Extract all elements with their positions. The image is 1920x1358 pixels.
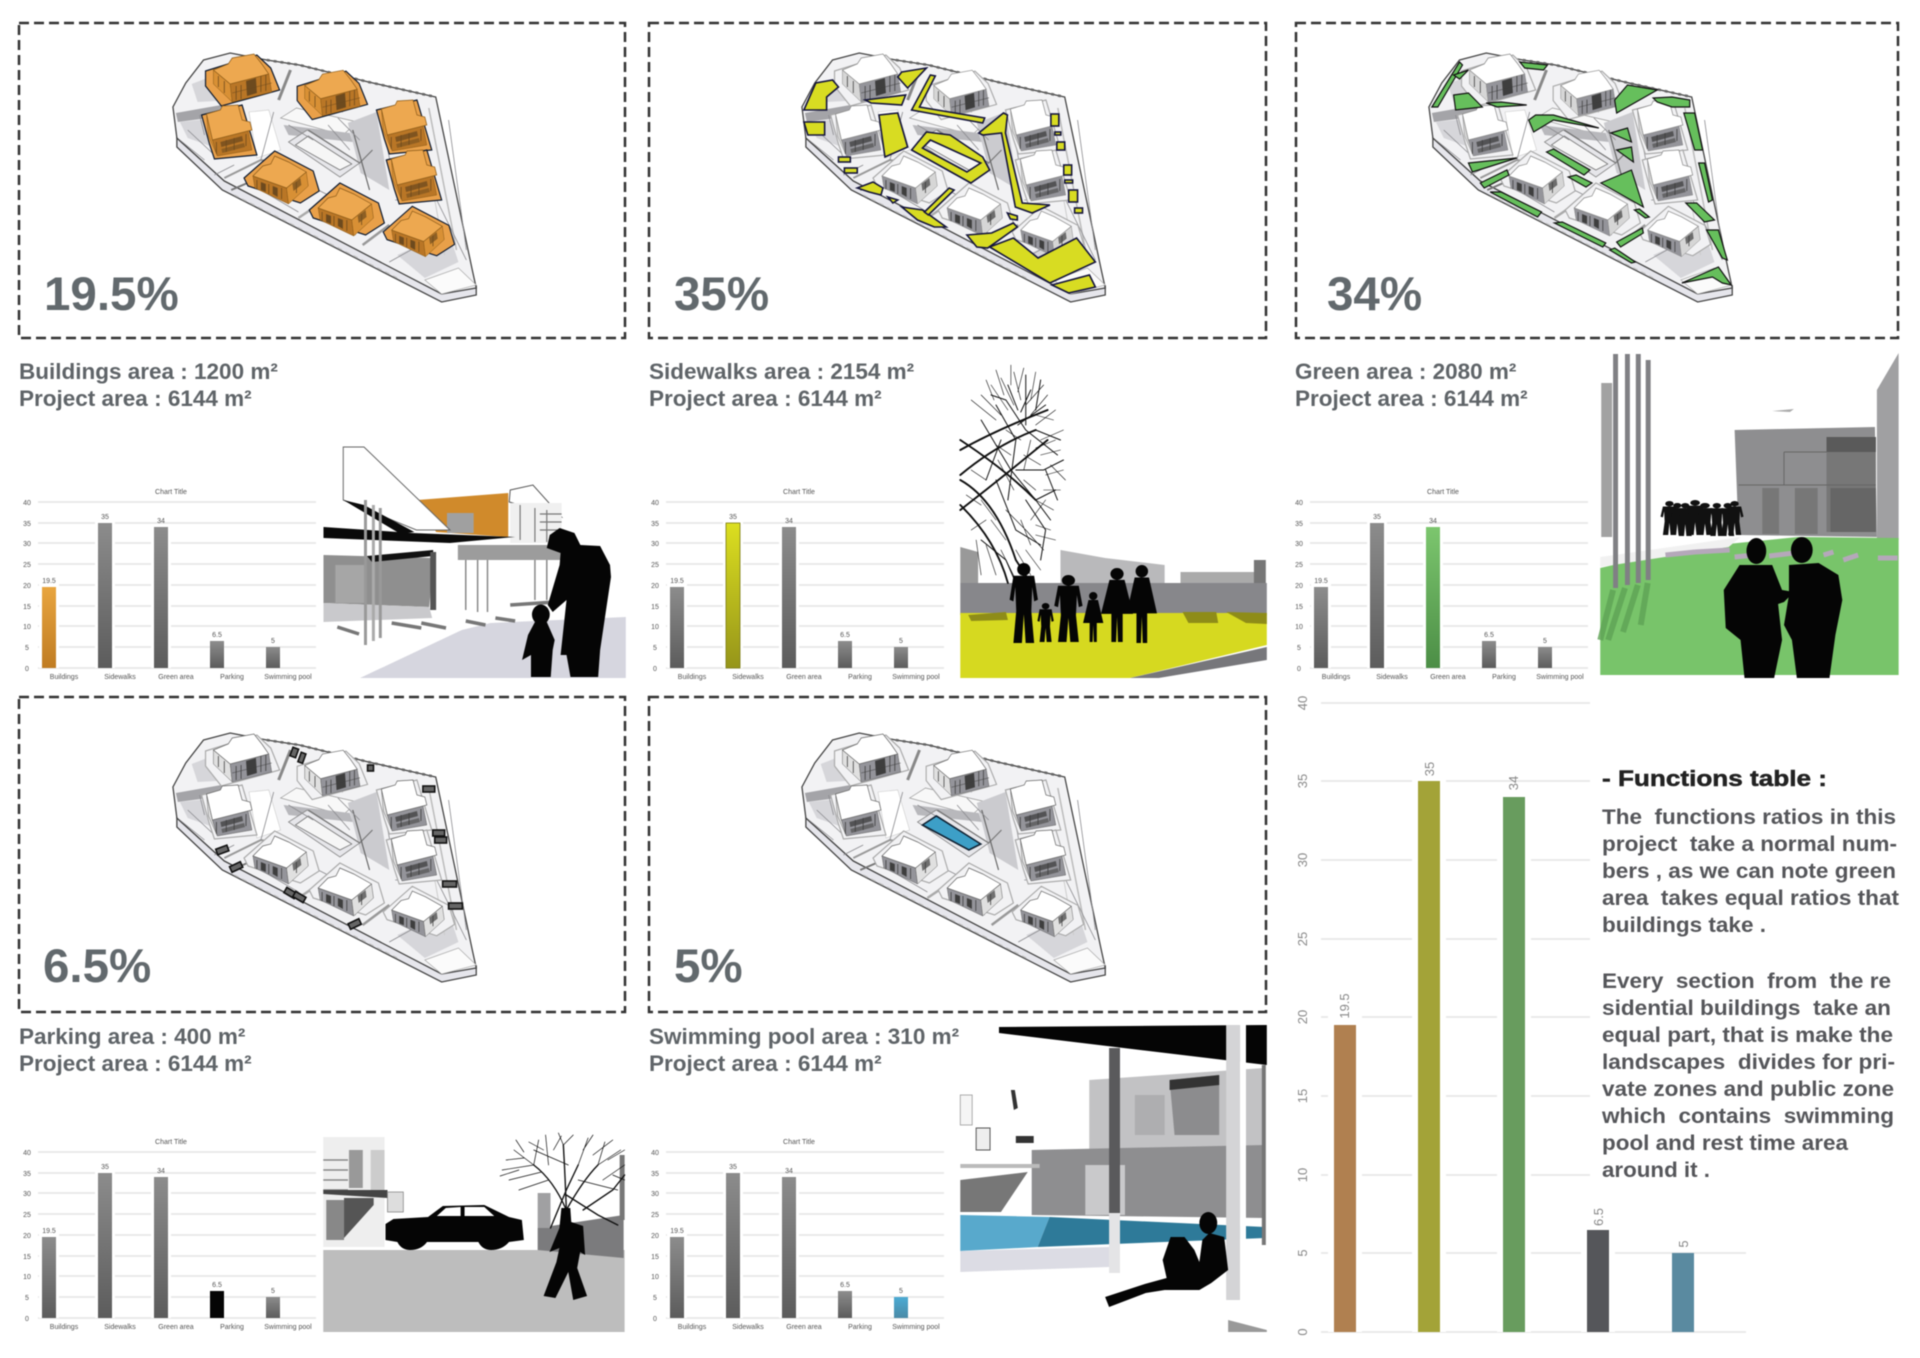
bar chart: parking highlighted: 34 (157, 1168, 165, 1175)
bar chart: green area highlighted (1295, 489, 1588, 681)
text: swimming pool area: Project area : 6144 m² (649, 1051, 882, 1076)
overall functions bar chart: 20 (1295, 1010, 1310, 1024)
text block: functions description: vate zones and public zone (1602, 1078, 1894, 1101)
text: parking area: Project area : 6144 m² (19, 1051, 252, 1076)
bar chart: green area highlighted: 0 (1297, 666, 1301, 673)
bar chart: green area highlighted: 40 (1295, 500, 1303, 507)
panel: sidewalks site diagram (649, 23, 1266, 338)
bar chart: buildings highlighted: 5 (271, 638, 275, 645)
bar chart: buildings highlighted: Parking (220, 674, 244, 681)
bar chart: swimming pool highlighted: 35 (729, 1164, 737, 1171)
heading: functions table: - Functions table : (1602, 766, 1827, 791)
text: sidewalks area: Project area : 6144 m² (649, 386, 882, 411)
overall functions bar chart: 15 (1295, 1089, 1310, 1103)
text block: functions description: around it . (1602, 1159, 1710, 1182)
panel: buildings site diagram (19, 23, 625, 338)
bar chart: buildings highlighted: 0 (25, 666, 29, 673)
overall functions bar chart: 0 (1295, 1328, 1310, 1336)
bar chart: sidewalks highlighted: 19.5 (670, 578, 684, 585)
bar chart: sidewalks highlighted: 40 (651, 500, 659, 507)
bar chart: parking highlighted: 10 (23, 1274, 31, 1281)
bar chart: buildings highlighted: 35 (23, 521, 31, 528)
percentage: swimming pool: 5% (674, 940, 743, 993)
bar chart: buildings highlighted: 40 (23, 500, 31, 507)
bar chart: buildings highlighted: 20 (23, 583, 31, 590)
bar chart: buildings highlighted: Green area (158, 674, 194, 681)
bar chart: parking highlighted: 20 (23, 1233, 31, 1240)
bar chart: green area highlighted: Chart Title (1427, 489, 1459, 496)
bar chart: swimming pool highlighted: 30 (651, 1191, 659, 1198)
bar chart: sidewalks highlighted: 20 (651, 583, 659, 590)
overall functions bar chart: 35 (1295, 774, 1310, 788)
bar chart: parking highlighted: 35 (101, 1164, 109, 1171)
bar chart: parking highlighted: Buildings (50, 1324, 79, 1331)
bar chart: green area highlighted: 30 (1295, 541, 1303, 548)
text block: functions description: which contains swimming (1601, 1105, 1894, 1128)
bar chart: green area highlighted: 10 (1295, 624, 1303, 631)
bar chart: parking highlighted: Green area (158, 1324, 194, 1331)
bar chart: sidewalks highlighted: 34 (785, 518, 793, 525)
bar chart: swimming pool highlighted (651, 1139, 944, 1331)
bar chart: sidewalks highlighted: 25 (651, 562, 659, 569)
bar chart: parking highlighted: 0 (25, 1316, 29, 1323)
bar chart: parking highlighted: 6.5 (212, 1282, 222, 1289)
bar chart: swimming pool highlighted: 19.5 (670, 1228, 684, 1235)
silhouettes: family (1010, 563, 1157, 643)
bar chart: green area highlighted: 19.5 (1314, 578, 1328, 585)
text: green area (1295, 359, 1528, 411)
bar chart: parking highlighted: 30 (23, 1191, 31, 1198)
overall functions bar chart: 10 (1295, 1168, 1310, 1182)
bar chart: sidewalks highlighted: 0 (653, 666, 657, 673)
bar chart: buildings highlighted: Buildings (50, 674, 79, 681)
bar chart: green area highlighted: 34 (1429, 518, 1437, 525)
bar chart: green area highlighted: 15 (1295, 604, 1303, 611)
bar chart: green area highlighted: 25 (1295, 562, 1303, 569)
bar chart: parking highlighted: 25 (23, 1212, 31, 1219)
bar chart: sidewalks highlighted: 35 (651, 521, 659, 528)
bar chart: sidewalks highlighted (651, 489, 944, 681)
silhouette: walking man (544, 1208, 587, 1300)
bar chart: buildings highlighted: Sidewalks (104, 674, 136, 681)
bar chart: sidewalks highlighted: Swimming pool (892, 674, 940, 681)
bar chart: buildings highlighted: 35 (101, 514, 109, 521)
text block: functions description: bers , as we can note green (1602, 860, 1896, 883)
tree (500, 1133, 625, 1228)
text: parking area: Parking area : 400 m² (19, 1024, 246, 1049)
percentage: parking: 6.5% (43, 940, 151, 993)
overall functions bar chart: 6.5 (1591, 1208, 1606, 1226)
scene: car and walking man (323, 1133, 625, 1332)
bar chart: green area highlighted: Buildings (1322, 674, 1351, 681)
overall functions bar chart: 25 (1295, 932, 1310, 946)
bar chart: swimming pool highlighted: 6.5 (840, 1282, 850, 1289)
percentage: green area: 34% (1327, 268, 1422, 321)
bar chart: parking highlighted: Sidewalks (104, 1324, 136, 1331)
bar chart: green area highlighted: 35 (1373, 514, 1381, 521)
overall functions bar chart: 34 (1506, 776, 1521, 790)
silhouette: seated person (1105, 1212, 1228, 1307)
bar chart: green area highlighted: Swimming pool (1536, 674, 1584, 681)
bar chart: swimming pool highlighted: 10 (651, 1274, 659, 1281)
overall functions bar chart: 19.5 (1337, 993, 1352, 1019)
swimming pool highlight (922, 816, 981, 850)
bar chart: parking highlighted: Chart Title (155, 1139, 187, 1146)
text: buildings area (19, 359, 278, 411)
text: sidewalks area: Sidewalks area : 2154 m² (649, 359, 915, 384)
bar chart: buildings highlighted: Chart Title (155, 489, 187, 496)
bar chart: swimming pool highlighted: Sidewalks (732, 1324, 764, 1331)
bar chart: sidewalks highlighted: 30 (651, 541, 659, 548)
panel: swimming pool site diagram (649, 697, 1266, 1012)
overall functions bar chart: 30 (1295, 853, 1310, 867)
text block: functions description: landscapes divides for pri- (1602, 1051, 1895, 1074)
bar chart: sidewalks highlighted: 5 (899, 638, 903, 645)
bar chart: swimming pool highlighted: Chart Title (783, 1139, 815, 1146)
scene: father and child at entrance (323, 447, 626, 678)
silhouette: car (386, 1205, 524, 1250)
bar chart: green area highlighted: 5 (1543, 638, 1547, 645)
bar chart: green area highlighted: Green area (1430, 674, 1466, 681)
bar chart: swimming pool highlighted: 34 (785, 1168, 793, 1175)
bar chart: green area highlighted: 20 (1295, 583, 1303, 590)
text block: functions description: Every section from the re (1602, 970, 1891, 993)
bar chart: parking highlighted: 15 (23, 1254, 31, 1261)
bar chart: buildings highlighted: 34 (157, 518, 165, 525)
bar chart: swimming pool highlighted: Buildings (678, 1324, 707, 1331)
percentage: buildings: 19.5% (44, 268, 179, 321)
bar chart: parking highlighted: Parking (220, 1324, 244, 1331)
panel: parking site diagram (19, 697, 625, 1012)
text: swimming pool area (649, 1024, 960, 1076)
silhouette: child (522, 605, 555, 677)
text block: functions description: area takes equal ratios that (1602, 887, 1899, 910)
bar chart: sidewalks highlighted: Sidewalks (732, 674, 764, 681)
bar chart: swimming pool highlighted: 40 (651, 1150, 659, 1157)
scene: two men on green lawn (1600, 353, 1899, 678)
bar chart: sidewalks highlighted: 15 (651, 604, 659, 611)
bar chart: swimming pool highlighted: Swimming pool (892, 1324, 940, 1331)
bar chart: sidewalks highlighted: 6.5 (840, 632, 850, 639)
bar chart: green area highlighted: 5 (1297, 645, 1301, 652)
bar chart: swimming pool highlighted: Parking (848, 1324, 872, 1331)
silhouettes: distant crowd (1661, 500, 1744, 536)
bar chart: parking highlighted: 5 (271, 1288, 275, 1295)
text block: functions description: project take a normal num- (1602, 833, 1897, 856)
bar chart: parking highlighted: 5 (25, 1295, 29, 1302)
silhouette: father (547, 528, 611, 677)
bar chart: buildings highlighted: 30 (23, 541, 31, 548)
bar chart: swimming pool highlighted: 15 (651, 1254, 659, 1261)
bar chart: swimming pool highlighted: Green area (786, 1324, 822, 1331)
silhouette: right man (1784, 537, 1842, 678)
text block: functions description (1601, 806, 1899, 1182)
text: buildings area: Project area : 6144 m² (19, 386, 252, 411)
bar chart: swimming pool highlighted: 25 (651, 1212, 659, 1219)
bar chart: green area highlighted: Sidewalks (1376, 674, 1408, 681)
scene: family on yellow sidewalk (960, 365, 1267, 678)
bar chart: swimming pool highlighted: 5 (899, 1288, 903, 1295)
tree (960, 365, 1065, 583)
percentage: sidewalks: 35% (674, 268, 769, 321)
bar chart: green area highlighted: 6.5 (1484, 632, 1494, 639)
bar chart: buildings highlighted: 10 (23, 624, 31, 631)
text block: functions description: pool and rest time area (1602, 1132, 1848, 1155)
overall functions bar chart: 5 (1295, 1249, 1310, 1257)
text: green area: Project area : 6144 m² (1295, 386, 1528, 411)
text: buildings area: Buildings area : 1200 m² (19, 359, 278, 384)
bar chart: swimming pool highlighted: 5 (653, 1295, 657, 1302)
bar chart: green area highlighted: 35 (1295, 521, 1303, 528)
text block: functions description: sidential buildings take an (1602, 997, 1891, 1020)
bar chart: parking highlighted: 19.5 (42, 1228, 56, 1235)
overall functions bar chart: 40 (1295, 696, 1310, 710)
text block: functions description: The functions ratios in this (1602, 806, 1896, 829)
sidewalks highlight (804, 68, 1095, 293)
overall functions bar chart: 5 (1676, 1240, 1691, 1248)
bar chart: parking highlighted: 35 (23, 1171, 31, 1178)
text: swimming pool area: Swimming pool area : 310 m² (649, 1024, 960, 1049)
text block: functions description: equal part, that is make the (1602, 1024, 1893, 1047)
bar chart: parking highlighted (23, 1139, 316, 1331)
bar chart: swimming pool highlighted: 0 (653, 1316, 657, 1323)
bar chart: parking highlighted: Swimming pool (264, 1324, 312, 1331)
bar chart: buildings highlighted: 25 (23, 562, 31, 569)
green area highlight (1432, 62, 1731, 285)
bar chart: buildings highlighted: Swimming pool (264, 674, 312, 681)
text block: functions description: buildings take . (1602, 914, 1766, 937)
bar chart: sidewalks highlighted: Parking (848, 674, 872, 681)
bar chart: buildings highlighted: 6.5 (212, 632, 222, 639)
bar chart: buildings highlighted: 5 (25, 645, 29, 652)
text: green area: Green area : 2080 m² (1295, 359, 1517, 384)
bar chart: sidewalks highlighted: 10 (651, 624, 659, 631)
bar chart: green area highlighted: Parking (1492, 674, 1516, 681)
overall functions bar chart (1295, 696, 1746, 1336)
panel: green area site diagram (1296, 23, 1898, 338)
bar chart: sidewalks highlighted: Chart Title (783, 489, 815, 496)
overall functions bar chart: 35 (1422, 762, 1437, 776)
text: sidewalks area (649, 359, 915, 411)
text: parking area (19, 1024, 252, 1076)
silhouette: left man (1724, 538, 1794, 678)
bar chart: sidewalks highlighted: 5 (653, 645, 657, 652)
bar chart: buildings highlighted: 19.5 (42, 578, 56, 585)
bar chart: parking highlighted: 40 (23, 1150, 31, 1157)
scene: person sitting by the pool (960, 1025, 1267, 1332)
bar chart: swimming pool highlighted: 20 (651, 1233, 659, 1240)
bar chart: sidewalks highlighted: Buildings (678, 674, 707, 681)
bar chart: buildings highlighted: 15 (23, 604, 31, 611)
bar chart: sidewalks highlighted: 35 (729, 514, 737, 521)
bar chart: sidewalks highlighted: Green area (786, 674, 822, 681)
bar chart: buildings highlighted (23, 489, 316, 681)
parking highlight (216, 747, 462, 929)
bar chart: swimming pool highlighted: 35 (651, 1171, 659, 1178)
